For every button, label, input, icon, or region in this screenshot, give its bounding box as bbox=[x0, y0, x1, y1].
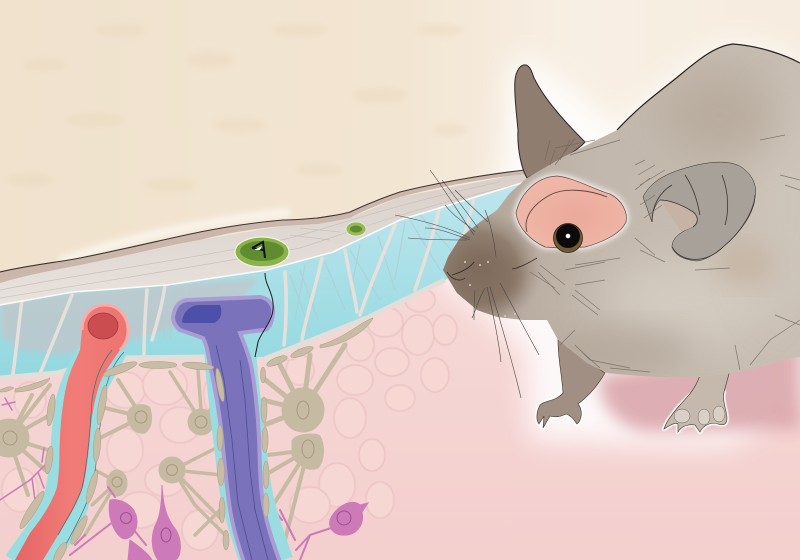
mouse shadow bbox=[599, 340, 800, 432]
artery wall lines bbox=[58, 350, 124, 548]
vein lumen bbox=[182, 305, 221, 323]
neuron low bbox=[128, 540, 152, 560]
mouse bbox=[395, 44, 800, 432]
green capillary large bbox=[235, 237, 289, 267]
vein inner lines bbox=[216, 345, 268, 560]
artery lumen bbox=[88, 313, 118, 339]
endfeet bbox=[0, 318, 373, 560]
fur strokes bbox=[530, 135, 800, 372]
mottled texture bbox=[6, 23, 468, 192]
astrocyte 7 bbox=[85, 470, 127, 535]
dermis fibres bbox=[0, 182, 510, 298]
near foot toes bbox=[674, 406, 725, 425]
muzzle specks bbox=[464, 261, 516, 317]
big ear bbox=[643, 162, 756, 261]
brain tissue: cell outlines bbox=[2, 288, 457, 550]
eye patch bbox=[516, 176, 626, 248]
eye patch fold bbox=[526, 190, 607, 232]
mouse tall ear bbox=[515, 65, 585, 178]
trabeculae bbox=[12, 192, 475, 380]
grey overlay on band bbox=[0, 278, 260, 355]
green capillary small bbox=[346, 222, 366, 236]
mouse body bbox=[443, 44, 800, 377]
skin outline bbox=[0, 170, 525, 272]
astrocyte 6 bbox=[159, 445, 225, 535]
ear ridges and outline bbox=[652, 175, 755, 259]
axon branches left bbox=[0, 398, 45, 500]
arrow glyph bbox=[252, 242, 265, 258]
meningeal crack bbox=[255, 273, 273, 357]
perivascular space around vein bbox=[230, 345, 268, 560]
artery bbox=[15, 305, 128, 560]
neurons bbox=[0, 398, 368, 560]
eye patch glow bbox=[516, 176, 626, 247]
subarachnoid blue band bbox=[0, 178, 530, 378]
dermis lower highlight bbox=[0, 182, 525, 305]
astrocyte 2 bbox=[100, 380, 152, 438]
eye bbox=[554, 224, 582, 252]
astrocyte 4 bbox=[263, 345, 345, 432]
astrocyte 5 bbox=[265, 434, 324, 540]
soma nuclei outlines bbox=[3, 401, 314, 487]
epidermis bbox=[0, 170, 525, 283]
mouth and nose lines bbox=[447, 258, 537, 280]
vein bbox=[173, 297, 280, 560]
inner ear bbox=[660, 200, 697, 232]
mouse near leg bbox=[664, 370, 730, 432]
astrocytes bbox=[0, 345, 345, 540]
body shading bbox=[443, 64, 774, 376]
fine trabecular fibres bbox=[164, 215, 452, 340]
mouse glow bbox=[430, 44, 800, 445]
light glow above skin bbox=[60, 212, 290, 262]
perivascular space around artery bbox=[25, 345, 105, 560]
background: pink lower tissue bbox=[0, 200, 800, 560]
feet halo bbox=[537, 390, 727, 432]
neuron left bbox=[70, 487, 146, 555]
background: beige upper tissue bbox=[0, 0, 800, 300]
whiskers bbox=[395, 170, 539, 398]
astrocyte 3 bbox=[170, 370, 222, 435]
astrocyte 1 bbox=[0, 385, 50, 495]
neuron center bbox=[152, 485, 180, 560]
body outline top bbox=[617, 44, 800, 130]
neuron right bbox=[270, 502, 368, 560]
mouse far leg bbox=[537, 340, 605, 428]
dermis layer bbox=[0, 172, 530, 305]
pia lower edge bbox=[0, 280, 445, 378]
